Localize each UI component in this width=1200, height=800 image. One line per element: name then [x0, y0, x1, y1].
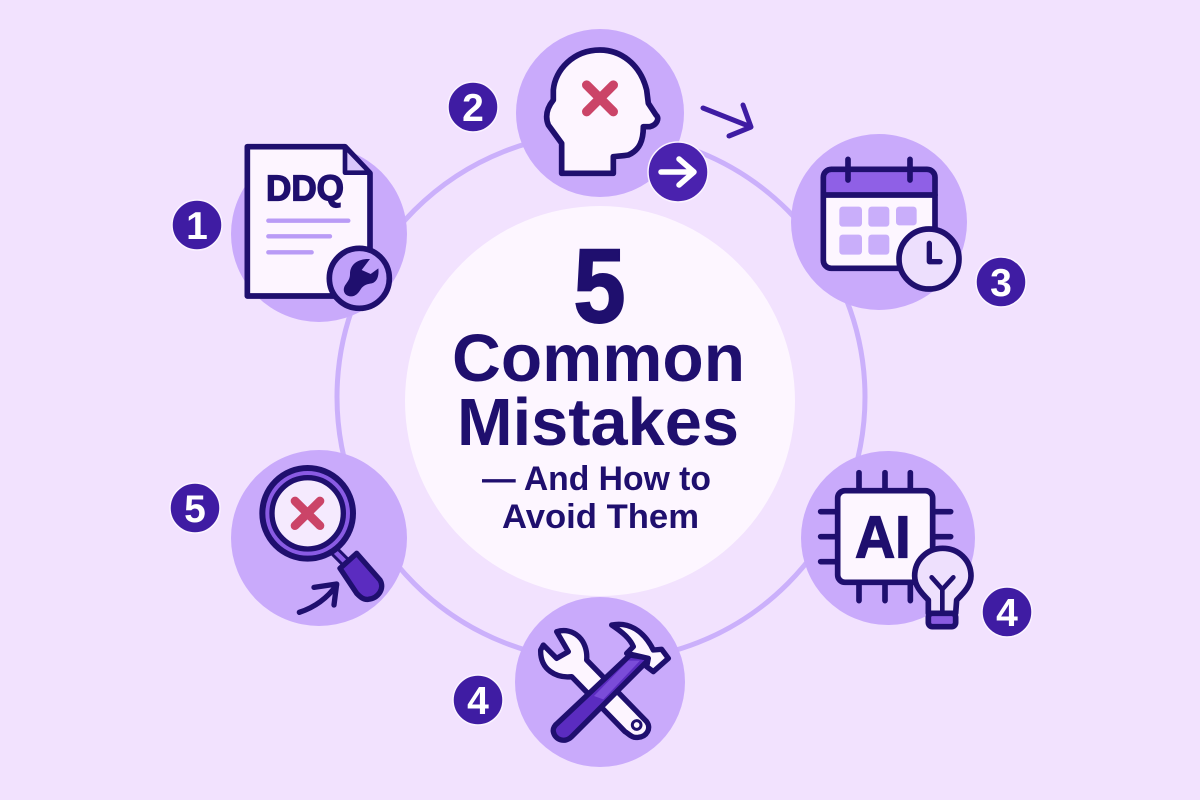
number badge 2: 2: [462, 87, 484, 130]
item 2: head with x: [516, 29, 684, 197]
item 1: DDQ document with wrench: [231, 146, 407, 322]
subtitle line two: Avoid Them: [502, 498, 699, 536]
number badge 3: [976, 257, 1026, 307]
item 3: calendar with clock: [791, 134, 967, 310]
icon: AI chip: AI: [855, 504, 911, 571]
center title circle: [405, 206, 795, 596]
icon: head: [547, 50, 658, 173]
icon: AI chip: [821, 473, 971, 627]
number badge 5: [170, 483, 220, 533]
icon: calendar: [823, 159, 959, 289]
item 4: AI chip with light bulb: [801, 451, 975, 627]
number badge 1: [172, 200, 222, 250]
number badge 4 bottom: 4: [467, 680, 489, 723]
number badge 3: 3: [990, 262, 1012, 305]
title: Common: Common: [452, 321, 745, 396]
number badge 4 right: 4: [996, 592, 1018, 635]
arrow: free hand: [703, 105, 751, 136]
icon: tools: [541, 624, 668, 740]
subtitle line one: — And How to: [482, 460, 711, 498]
title: 5: 5: [574, 228, 626, 345]
number badge 4 right: [982, 587, 1032, 637]
connecting ring: [337, 133, 865, 661]
number badge 1: 1: [186, 205, 208, 248]
item 5: magnifier with x: [231, 450, 407, 626]
item 4: crossed wrench and hammer: [515, 597, 685, 767]
title: Mistakes: Mistakes: [457, 385, 739, 460]
number badge 4 bottom: [453, 675, 503, 725]
icon: magnifier: [262, 468, 382, 612]
arrow badge: [648, 142, 708, 202]
number badge 2: [448, 82, 498, 132]
icon: DDQ document: [247, 147, 389, 308]
icon: DDQ document: DDQ: [266, 169, 344, 209]
number badge 5: 5: [184, 488, 206, 531]
